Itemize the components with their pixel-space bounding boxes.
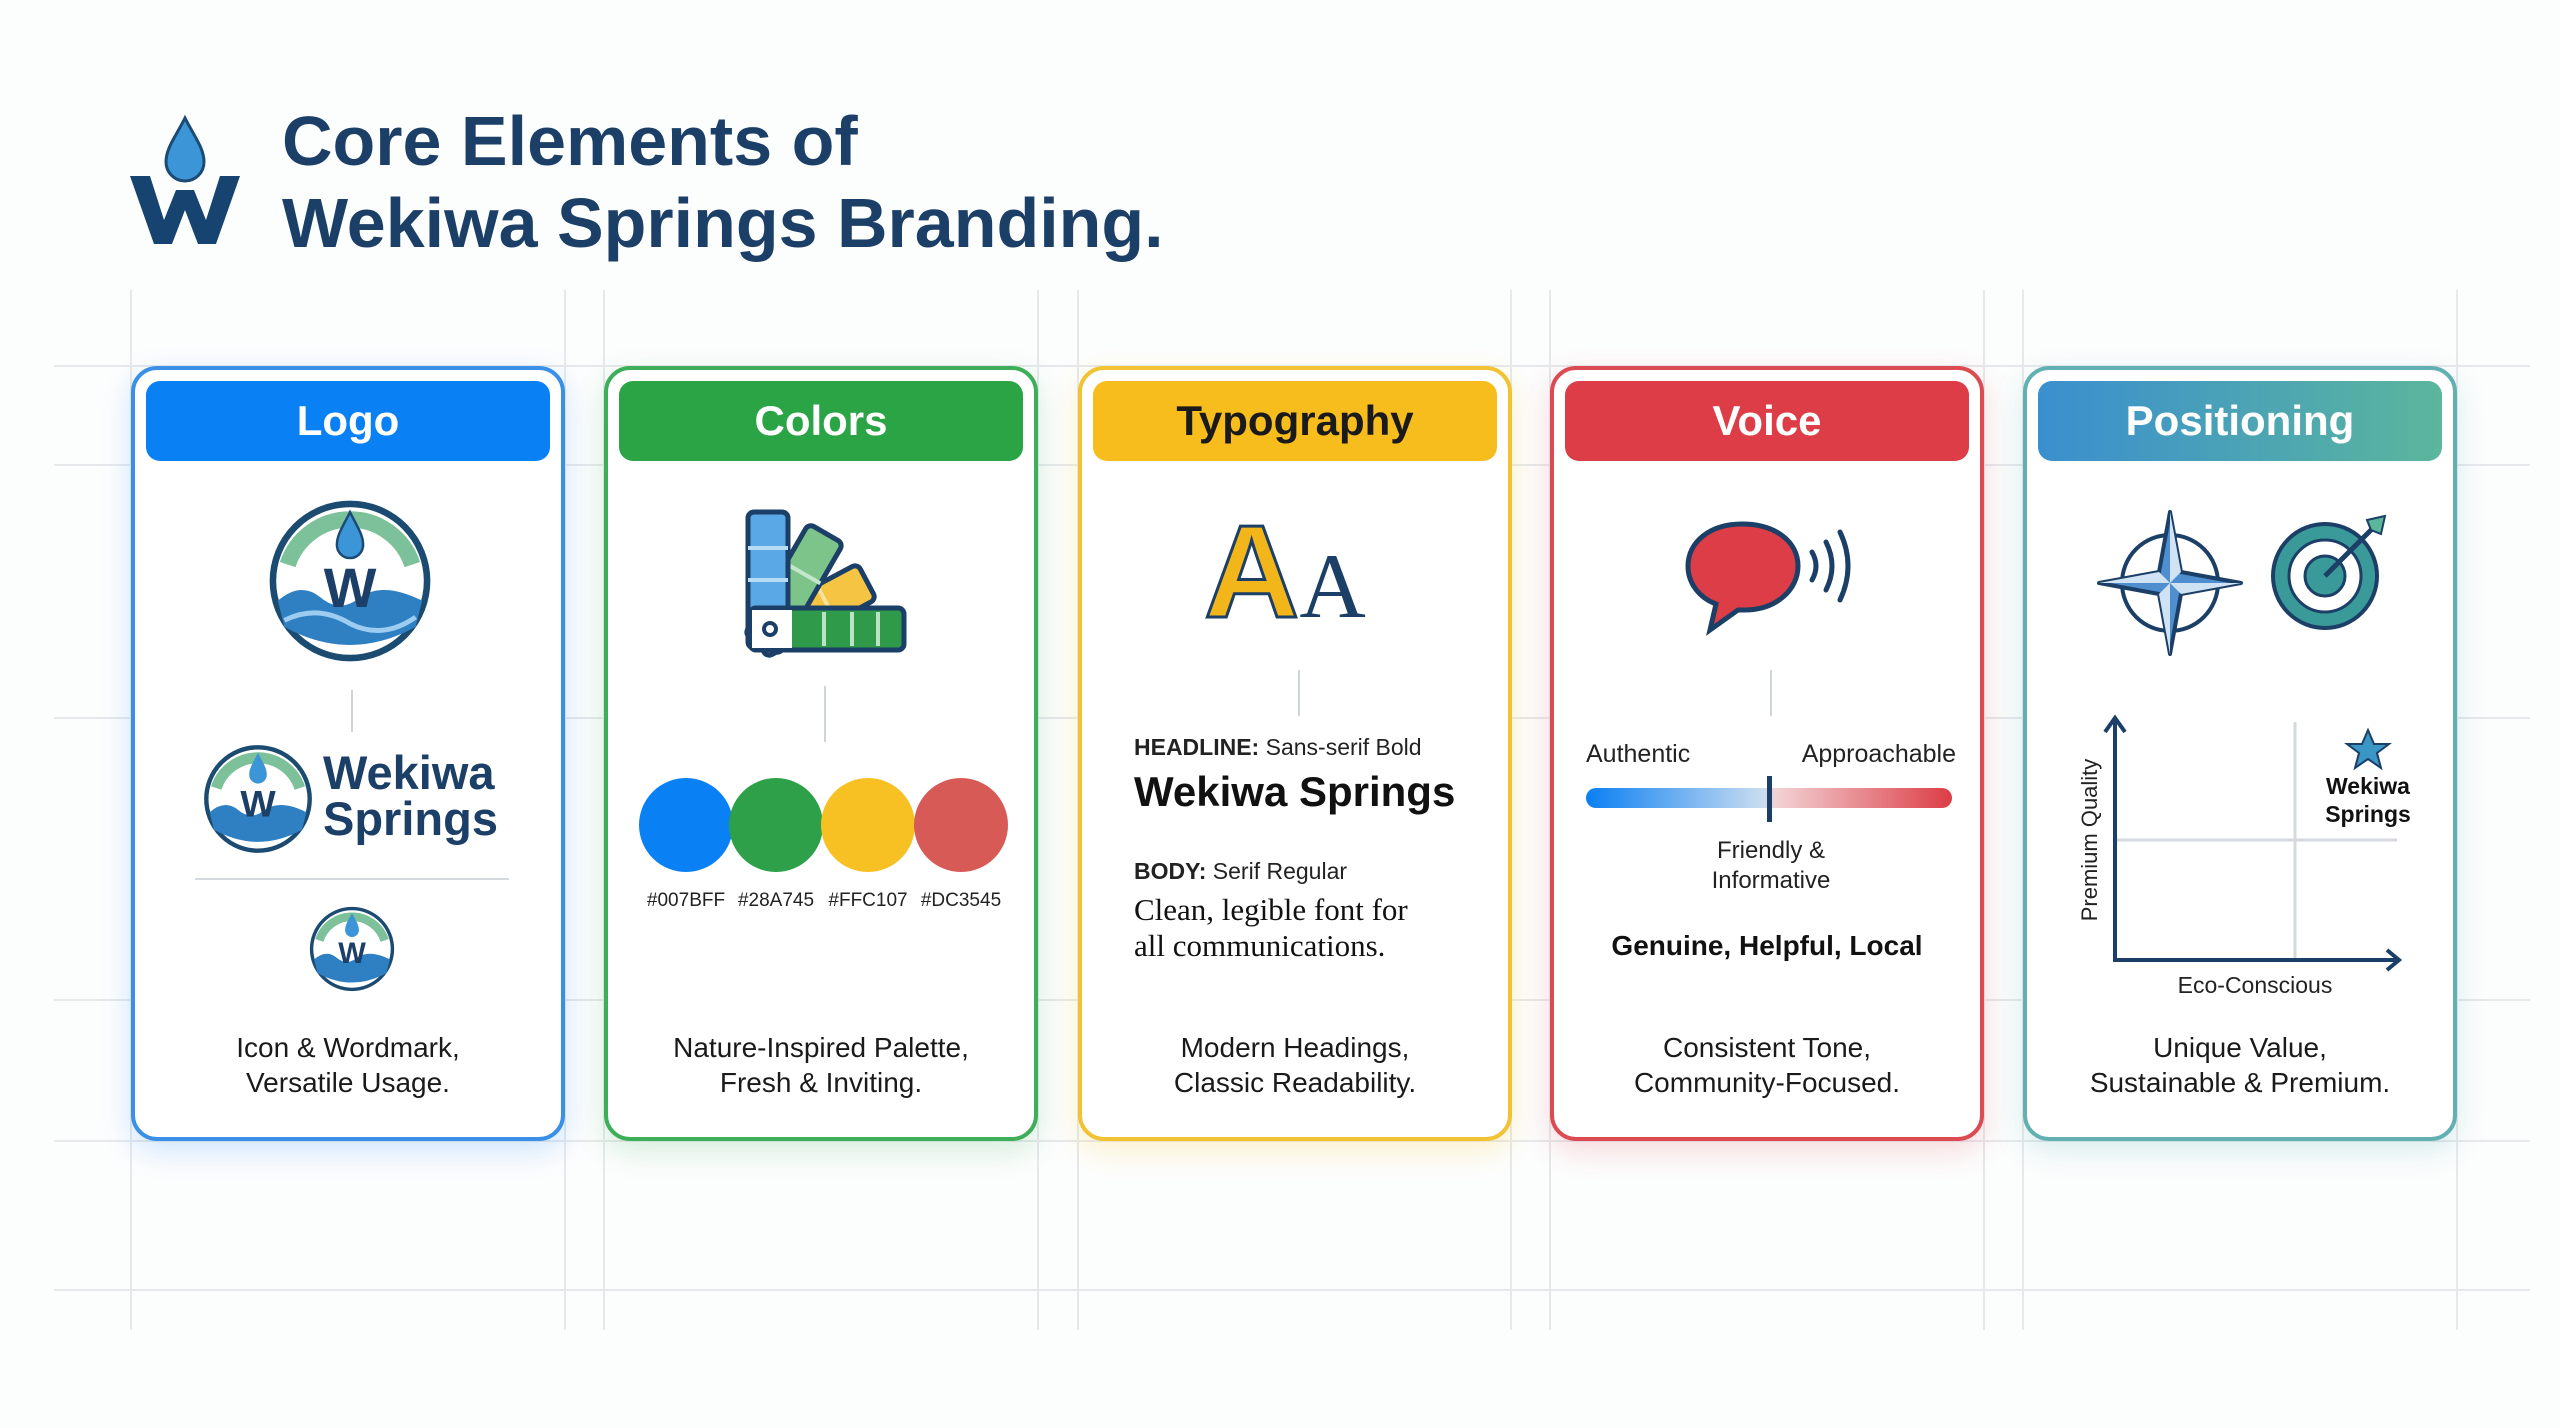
caption: typography: Classic Readability. (1174, 1067, 1416, 1098)
panel: typography: all communications. (1134, 928, 1385, 963)
title (282, 102, 1164, 262)
caption: typography: Modern Headings, (1181, 1032, 1409, 1063)
title: Core Elements of (282, 102, 858, 180)
panel: colors: #28A745 (738, 890, 814, 911)
panel: typography: Clean, legible font for (1134, 892, 1408, 927)
caption: colors: Fresh & Inviting. (720, 1067, 922, 1098)
wordmark: W (240, 783, 276, 825)
caption: voice: Community-Focused. (1634, 1067, 1900, 1098)
icon: emblem large: W (324, 557, 377, 619)
hex labels (646, 890, 1001, 911)
positioning chart: Eco-Conscious (2178, 972, 2332, 998)
tone slider (1586, 740, 1956, 894)
positioning chart: Wekiwa (2326, 773, 2410, 799)
header: voice (1565, 381, 1969, 461)
caption: positioning: Sustainable & Premium. (2090, 1067, 2390, 1098)
icon: Aa glyphs: AA (1204, 498, 1366, 645)
color circles (639, 778, 1008, 872)
caption: voice: Consistent Tone, (1663, 1032, 1871, 1063)
header: typography (1093, 381, 1497, 461)
caption: colors (673, 1032, 969, 1098)
caption: logo (236, 1032, 460, 1098)
title: Wekiwa Springs Branding. (282, 184, 1164, 262)
header: colors (619, 381, 1023, 461)
icon: target (2271, 514, 2386, 630)
header: logo (146, 381, 550, 461)
icon: brand logo (130, 114, 240, 244)
icon: emblem small (310, 906, 394, 992)
wordmark (204, 745, 498, 853)
header: typography: Typography (1176, 397, 1414, 444)
icon: emblem large (270, 500, 430, 662)
panel: typography: Wekiwa Springs (1134, 768, 1455, 815)
panel: colors: #007BFF (647, 890, 725, 911)
panel: colors: #DC3545 (921, 890, 1001, 911)
icon: emblem small: W (338, 938, 366, 970)
icon: swatch fan (744, 510, 906, 658)
panel: positioning (2023, 366, 2457, 1141)
header: positioning (2038, 381, 2442, 461)
header: voice: Voice (1713, 397, 1821, 444)
panel: voice (1550, 366, 1984, 1141)
caption: logo: Icon & Wordmark, (236, 1032, 460, 1063)
header: colors: Colors (754, 397, 888, 444)
caption: positioning: Unique Value, (2153, 1032, 2327, 1063)
header: logo: Logo (297, 397, 399, 444)
panel: colors: #FFC107 (828, 890, 908, 911)
positioning chart (2077, 714, 2411, 998)
caption: colors: Nature-Inspired Palette, (673, 1032, 969, 1063)
caption: logo: Versatile Usage. (246, 1067, 450, 1098)
icon: compass (2097, 510, 2243, 656)
tone slider: Approachable (1802, 740, 1956, 768)
tone slider: Authentic (1586, 740, 1690, 768)
panel: colors (604, 366, 1038, 1141)
wordmark: Wekiwa (323, 746, 495, 799)
caption: typography (1174, 1032, 1416, 1098)
caption: positioning (2090, 1032, 2390, 1098)
voice traits: Genuine, Helpful, Local (1611, 930, 1923, 961)
body spec: BODY: Serif Regular (1134, 858, 1347, 884)
panel: typography (1078, 366, 1512, 1141)
header: positioning: Positioning (2126, 397, 2354, 444)
panel: logo (131, 366, 565, 1141)
tone slider: Friendly & (1717, 837, 1825, 864)
icon: speech bubble (1686, 522, 1850, 636)
wordmark: Springs (323, 792, 498, 845)
positioning chart: Premium Quality (2077, 759, 2102, 921)
headline spec: HEADLINE: Sans-serif Bold (1134, 734, 1422, 760)
positioning chart: Springs (2325, 801, 2411, 827)
panel: voice: Informative (1712, 867, 1830, 894)
caption: voice (1634, 1032, 1900, 1098)
